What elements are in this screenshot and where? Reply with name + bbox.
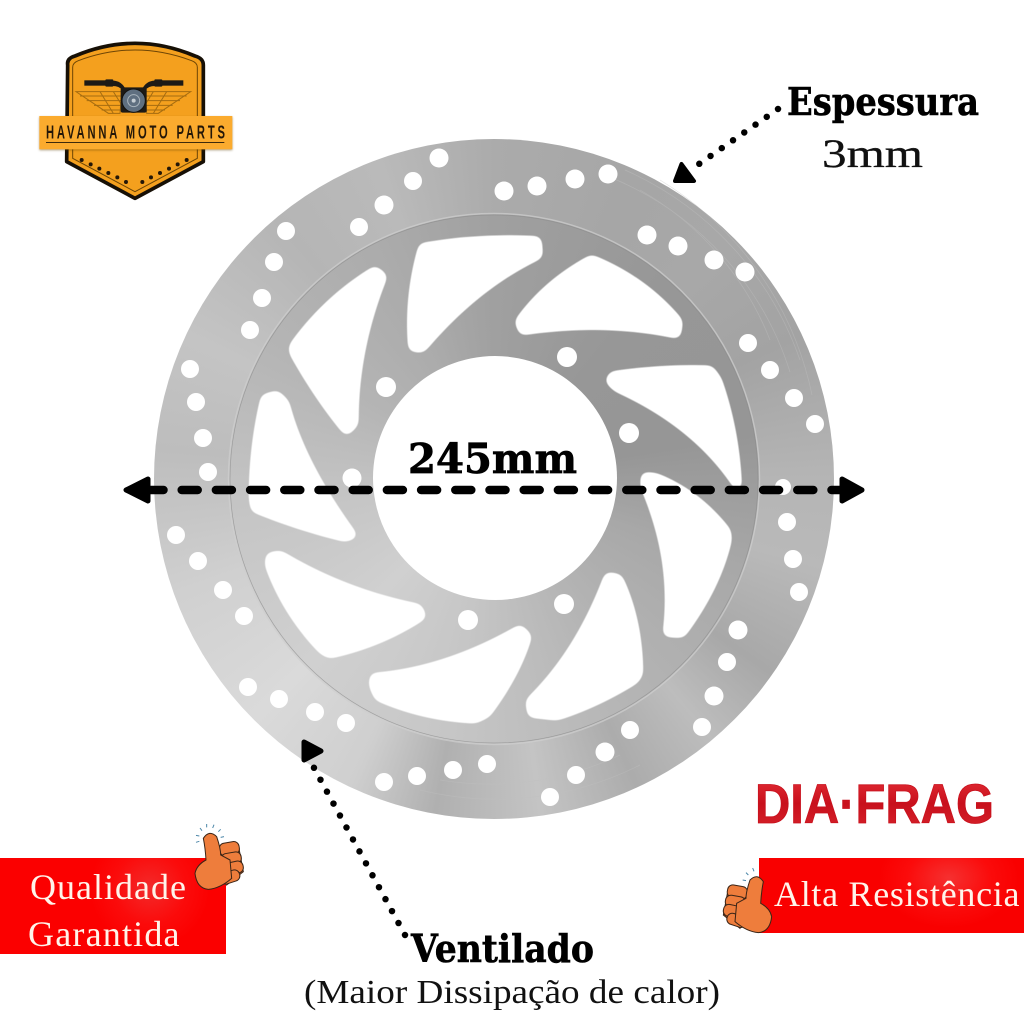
thickness value: 3mm <box>822 131 923 176</box>
inner ring edge <box>228 214 760 744</box>
badge: Alta Resistência <box>759 858 1024 933</box>
ventilation holes <box>167 148 824 806</box>
badge text: Alta Resistência <box>774 874 1020 914</box>
badge text line 2: Garantida <box>28 914 181 954</box>
motorcycle wings <box>76 92 191 113</box>
logo: Dia-Frag: DIA·FRAG <box>755 772 994 835</box>
diameter label: 245mm <box>408 435 577 483</box>
ventilation slots <box>253 240 737 719</box>
handlebars <box>84 79 183 113</box>
ventilated subtitle: (Maior Dissipação de calor) <box>304 974 720 1011</box>
thickness label: Espessura <box>787 79 979 124</box>
ventilated dotted arrow <box>304 742 405 935</box>
stars <box>80 158 189 184</box>
thickness dotted arrow <box>675 109 778 181</box>
brushed texture <box>420 170 812 799</box>
badge text line 1: Qualidade <box>30 867 187 907</box>
ventilated label: Ventilado <box>410 926 594 971</box>
centre bore <box>373 356 617 600</box>
diameter dashed arrow <box>126 479 862 501</box>
badge: Qualidade Garantida <box>0 858 226 954</box>
brand name: HAVANNA MOTO PARTS <box>46 123 225 143</box>
shield <box>67 43 203 198</box>
banner underline <box>46 141 224 144</box>
banner <box>39 116 232 149</box>
headlight <box>122 89 145 112</box>
